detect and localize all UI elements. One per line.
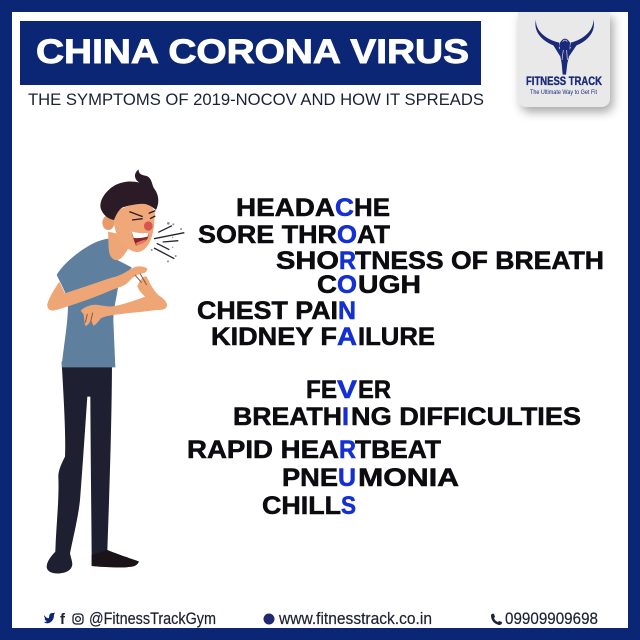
line: chest pain: N xyxy=(338,297,356,325)
arm: upper xyxy=(47,266,147,311)
line: breathing difficulties xyxy=(233,403,581,431)
footer: phone xyxy=(491,609,598,628)
title banner: CHINA CORONA VIRUS xyxy=(36,33,469,71)
line: rapid heartbeat xyxy=(187,436,441,464)
line: breathing difficulties: BREATH xyxy=(233,403,342,431)
shirt xyxy=(57,239,132,367)
line: shortness of breath: SHO xyxy=(276,247,339,275)
line: fever xyxy=(306,376,391,404)
line: sore throat xyxy=(198,221,390,249)
face xyxy=(113,203,155,252)
phone number: 09909909698 xyxy=(505,609,598,628)
line: rapid heartbeat: TBEAT xyxy=(355,436,441,464)
logo card xyxy=(518,12,610,107)
line: cough: UGH xyxy=(358,271,421,299)
line: fever: V xyxy=(337,376,357,404)
line: pneumonia: PNE xyxy=(282,464,338,492)
line: sore throat: O xyxy=(337,221,357,249)
acrostic: CORONA xyxy=(197,194,604,351)
line: fever: ER xyxy=(358,376,391,404)
line: headache xyxy=(236,194,390,222)
line: kidney failure: ILURE xyxy=(358,323,435,351)
line: chest pain: CHEST PAI xyxy=(197,297,338,325)
line: breathing difficulties: NG DIFFICULTIES xyxy=(351,403,581,431)
line: headache: C xyxy=(335,194,354,222)
line: shortness of breath: TNESS OF BREATH xyxy=(355,247,604,275)
website text: www.fitnesstrack.co.in xyxy=(278,609,432,628)
line: pneumonia xyxy=(282,464,459,492)
sneeze spray xyxy=(151,222,184,262)
subtitle: THE SYMPTOMS OF 2019-NOCOV AND HOW IT SPREADS xyxy=(28,91,484,109)
line: breathing difficulties: I xyxy=(342,403,349,431)
arm: lower xyxy=(81,276,167,326)
line: cough: O xyxy=(337,271,357,299)
icon: facebook: f xyxy=(60,611,66,628)
line: sore throat: SORE THR xyxy=(198,221,337,249)
handle text: @FitnessTrackGym xyxy=(89,609,216,628)
line: headache: HEADA xyxy=(236,194,335,222)
line: kidney failure: KIDNEY F xyxy=(211,323,337,351)
line: chills: CHILL xyxy=(262,492,341,520)
line: rapid heartbeat: RAPID HEA xyxy=(187,436,339,464)
line: kidney failure: A xyxy=(337,323,357,351)
line: cough xyxy=(317,271,421,299)
icon: twitter xyxy=(44,612,55,623)
illustration: sneezing man xyxy=(47,169,184,573)
line: pneumonia: MONIA xyxy=(358,464,459,492)
hair xyxy=(100,169,158,220)
line: chills: S xyxy=(341,492,356,520)
mouth xyxy=(132,231,149,245)
line: fever: FE xyxy=(306,376,337,404)
line: pneumonia: U xyxy=(338,464,356,492)
neck xyxy=(108,232,129,260)
ear xyxy=(102,215,114,230)
icon: logo figure xyxy=(535,19,594,75)
icon: phone xyxy=(491,614,502,625)
line: kidney failure xyxy=(211,323,435,351)
logo wordmark: FITNESS TRACK xyxy=(526,74,602,88)
title banner xyxy=(20,21,481,85)
line: sore throat: AT xyxy=(357,221,390,249)
line: shortness of breath: R xyxy=(339,247,356,275)
icon: globe xyxy=(264,614,274,624)
line: cough: C xyxy=(317,271,337,299)
footer: social handle xyxy=(44,609,216,628)
logo tagline: The Ultimate Way to Get Fit xyxy=(530,90,597,96)
icon: instagram xyxy=(73,614,83,624)
nose xyxy=(144,221,153,231)
line: rapid heartbeat: R xyxy=(339,436,356,464)
line: headache: HE xyxy=(354,194,390,222)
eyes xyxy=(129,211,155,220)
footer: website xyxy=(264,609,432,628)
trousers and shoes xyxy=(47,362,139,573)
acrostic: VIRUS xyxy=(187,376,581,520)
